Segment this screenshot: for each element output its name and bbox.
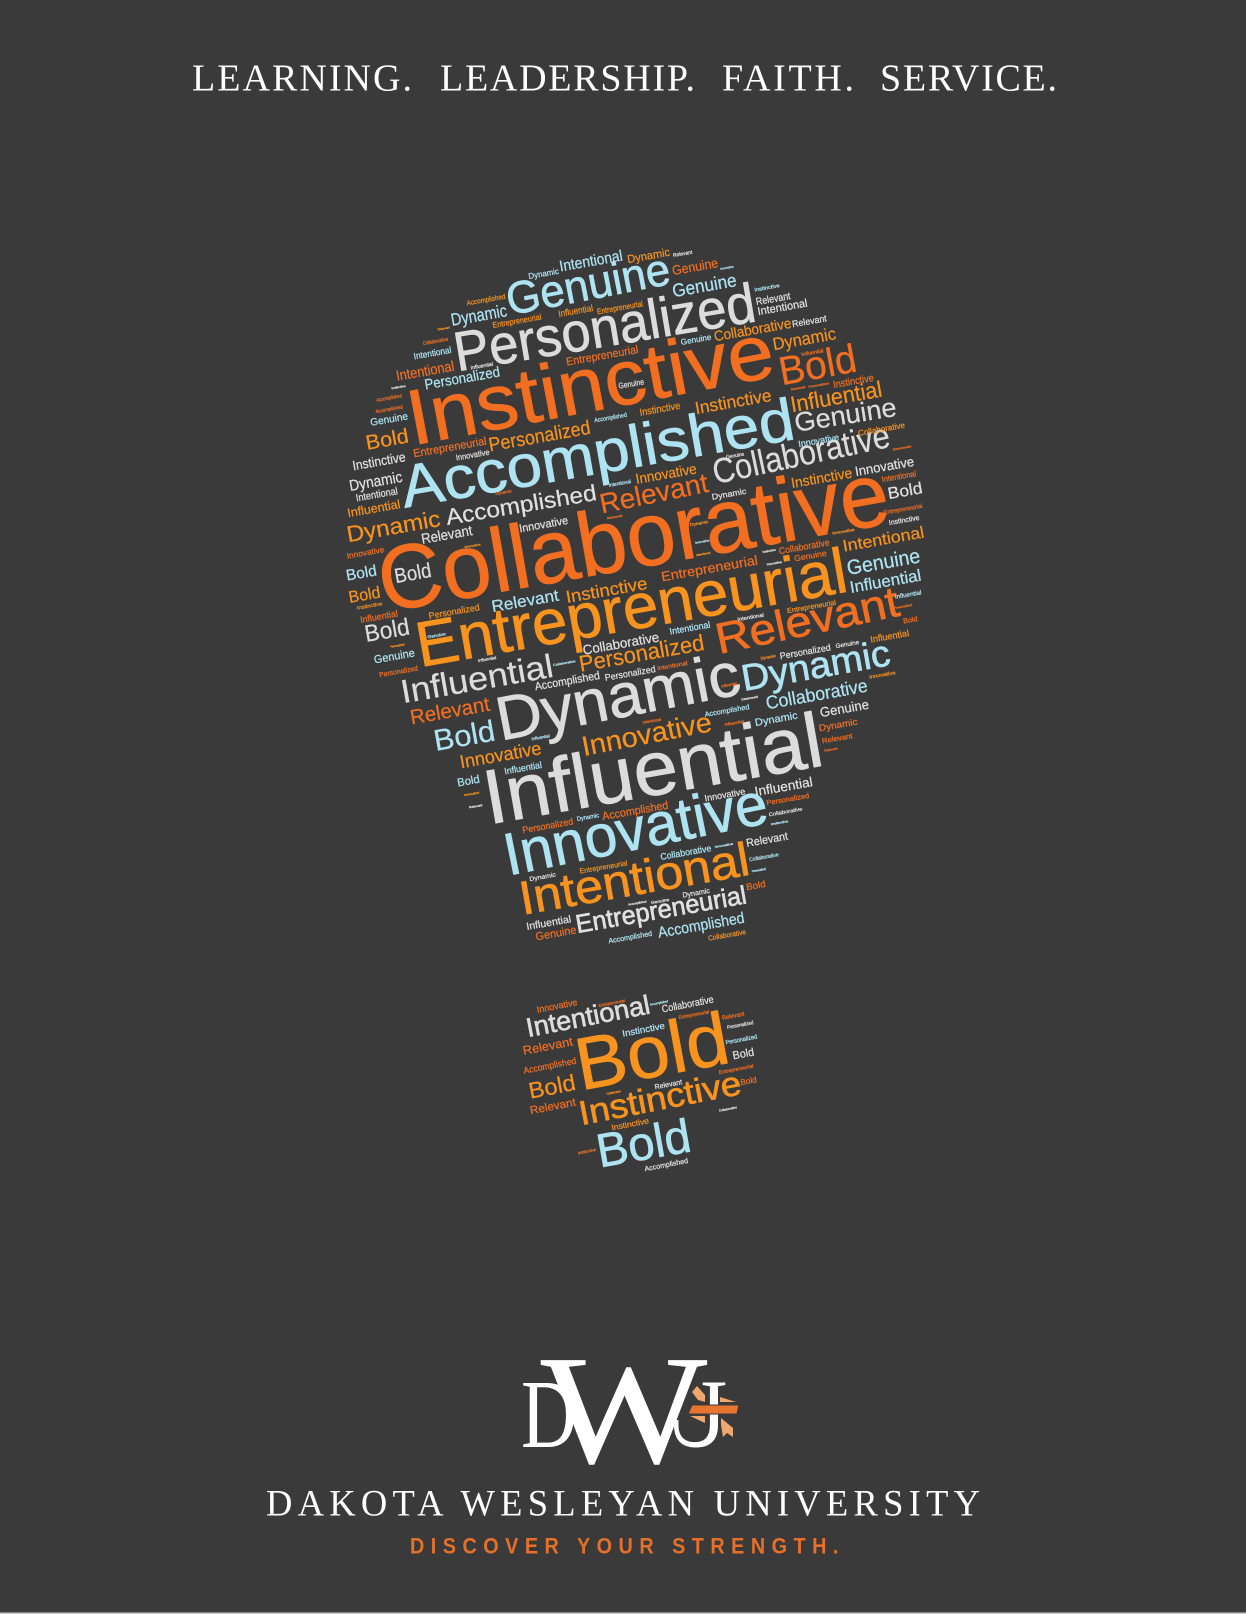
small words: Entrepreneurial (883, 503, 923, 517)
small base words: Instinctive (577, 1147, 597, 1155)
small words: Genuine (671, 255, 719, 278)
small words: Instinctive (888, 513, 920, 527)
small words: Intentional (413, 345, 452, 361)
small base words: Relevant (529, 1096, 578, 1117)
small words: Relevant (597, 467, 711, 519)
small words: Dynamic (344, 505, 442, 547)
small words: Collaborative (707, 927, 747, 943)
small words: Dynamic (690, 519, 709, 527)
small words: Accomplished (704, 702, 750, 719)
small base words: Entrepreneurial (718, 1064, 754, 1076)
small words: Innovative (464, 542, 481, 549)
small words: Personalized (487, 417, 592, 456)
small base words: Collaborative (606, 1089, 621, 1096)
small words: Relevant (490, 587, 561, 616)
small base words: Bold (732, 1046, 755, 1062)
word: Intentional (base): Intentional (523, 990, 652, 1043)
small words: Accomplished (594, 412, 628, 424)
small words: Relevant (469, 803, 483, 809)
small words: Intentional (642, 717, 661, 725)
small words: Intentional (355, 486, 399, 504)
small words: Entrepreneurial (786, 598, 837, 615)
small words: Genuine (845, 544, 922, 580)
small words: Personalized (577, 629, 706, 677)
small words: Collaborative (749, 852, 779, 863)
small words: Innovative (720, 265, 734, 271)
small words: Entrepreneurial (741, 695, 758, 702)
small words: Collaborative (582, 629, 660, 658)
small words: Intentional (558, 248, 624, 275)
small words: Genuine (370, 411, 409, 429)
small words: Influential (848, 567, 923, 597)
small words: Innovative (832, 527, 856, 536)
small words: Dynamic (682, 886, 711, 900)
small words: Entrepreneurial (607, 514, 623, 520)
small words: Innovative (695, 538, 710, 545)
small words: Personalized (522, 816, 574, 835)
small words: Instinctive (391, 384, 406, 390)
small words: Instinctive (351, 449, 407, 473)
small words: Dynamic (626, 247, 671, 266)
small words: Accomplished (601, 800, 669, 823)
small words: Dynamic (529, 872, 556, 883)
small base words: Relevant (522, 1034, 574, 1058)
small words: Accomplished (534, 670, 601, 693)
small words: Collaborative (778, 537, 830, 556)
small words: Personalized (808, 381, 829, 389)
small words: Personalized (751, 867, 767, 873)
small words: Genuine (726, 452, 745, 461)
small words: Relevant (420, 523, 474, 548)
small words: Influential (557, 303, 594, 319)
small base words: Collaborative (661, 995, 715, 1015)
word: Intentional: Intentional (515, 833, 753, 926)
small words: Accomplished (466, 292, 506, 307)
small words: Intentional (881, 469, 917, 484)
small words: Influential (470, 362, 494, 371)
small words: Bold (393, 559, 433, 588)
small words: Dynamic (818, 717, 859, 733)
small words: Influential (894, 589, 922, 601)
tagline: DISCOVER YOUR STRENGTH. (410, 1535, 838, 1559)
small words: Influential (397, 647, 556, 710)
small words: Entrepreneurial (579, 858, 628, 876)
small words: Personalized (378, 664, 419, 679)
small words: Personalized (766, 791, 810, 807)
small base words: Bold (526, 1069, 578, 1104)
small words: Bold (347, 584, 382, 607)
small words: Instinctive (356, 601, 383, 612)
word cloud: light bulb base (522, 990, 758, 1178)
small words: Personalized (423, 364, 501, 393)
small words: Influential (788, 376, 884, 417)
small words: Intentional (696, 551, 711, 557)
small words: Genuine (792, 392, 899, 438)
small words: Relevant (821, 731, 853, 745)
small words: Entrepreneurial (893, 444, 912, 451)
small words: Genuine (671, 269, 738, 301)
small words: Bold (431, 715, 498, 758)
small words: Dynamic (754, 711, 799, 729)
small words: Innovative (455, 448, 491, 463)
small words: Entrepreneurial (791, 385, 806, 391)
small words: Innovative (579, 706, 714, 762)
small words: Collaborative (709, 416, 893, 492)
title: Learning. Leadership. Faith. Service. (192, 58, 1057, 100)
logo: DWU monogram with cross (523, 1360, 738, 1465)
small words: Entrepreneurial (660, 553, 759, 584)
small words: Personalized (464, 791, 480, 797)
word: Collaborative: Collaborative (370, 443, 897, 632)
small words: Collaborative (553, 659, 576, 667)
small words: Personalized (390, 642, 405, 649)
small base words: Instinctive (611, 1116, 650, 1132)
small words: Accomplished (657, 910, 746, 942)
small words: Dynamic (576, 812, 600, 823)
small words: Bold (775, 336, 860, 394)
small words: Intentional (757, 298, 808, 318)
small words: Entrepreneurial (492, 313, 542, 330)
small words: Relevant (824, 746, 838, 753)
small words: Genuine (819, 697, 870, 720)
logo: DWU monogram with cross: W (541, 1324, 707, 1496)
small words: Relevant (755, 291, 792, 308)
logo: DWU monogram with cross: D (521, 1361, 577, 1468)
small words: Influential (724, 719, 744, 727)
small words: Intentional (841, 524, 926, 556)
small words: Instinctive (771, 819, 789, 826)
small words: Dynamic (449, 300, 509, 330)
word: Relevant: Relevant (711, 578, 903, 664)
small words: Innovative (766, 560, 783, 567)
small words: Intentional (608, 479, 632, 489)
word: Influential: Influential (477, 697, 829, 841)
small words: Bold (886, 479, 924, 503)
small words: Relevant (408, 693, 492, 729)
small base words: Bold (740, 1075, 758, 1087)
small words: Bold (363, 614, 412, 648)
small words: Accomplished (444, 479, 598, 530)
small words: Accomplished (376, 393, 403, 404)
small words: Instinctive (790, 466, 854, 492)
small words: Intentional (657, 660, 688, 672)
small words: Influential (359, 609, 399, 625)
small words (344, 247, 926, 945)
small words: Innovative (518, 515, 569, 535)
small words: Influential (503, 760, 543, 776)
small words: Entrepreneurial (412, 436, 488, 460)
small words: Genuine (650, 897, 670, 905)
small base words: Personalized (725, 1033, 758, 1046)
small base words: Entrepreneurial (598, 998, 625, 1008)
word: Instinctive: Instinctive (399, 306, 781, 462)
small words: Bold (364, 425, 410, 455)
small base words: Collaborative (719, 1105, 738, 1113)
small words: Genuine (680, 333, 712, 347)
small words: Genuine (535, 924, 577, 943)
small words: Influential (531, 733, 550, 741)
word: Dynamic (grey): Dynamic (490, 640, 746, 755)
small base words (522, 995, 758, 1173)
word cloud: light bulb glass (344, 243, 926, 945)
small words: Influential (526, 914, 572, 933)
small words: Personalized (779, 642, 831, 661)
word: Entrepreneurial: Entrepreneurial (410, 534, 852, 681)
small base words: Innovative (536, 997, 578, 1015)
small base words: Relevant (721, 1011, 745, 1022)
small words: Dynamic (711, 487, 747, 502)
small base words: Accomplished (644, 1156, 689, 1173)
small words: Relevant (437, 325, 450, 332)
small base words: Personalized (727, 1020, 754, 1031)
small words: Innovative (458, 737, 543, 772)
small words: Instinctive (639, 401, 682, 419)
small words: Instinctive (832, 373, 875, 391)
small words: Innovative (346, 545, 386, 561)
small words: Genuine (618, 377, 645, 391)
small words: Genuine (373, 647, 416, 666)
word: Genuine: Genuine (502, 243, 674, 325)
small words: Personalized (604, 664, 656, 683)
small words: Intentional (737, 613, 764, 623)
small words: Collaborative (764, 675, 869, 713)
small words: Personalized (894, 603, 913, 610)
title: Learning. Leadership. Faith. Service.: LEARNING. (192, 58, 412, 100)
small words: Bold (745, 879, 766, 892)
small words: Innovative (714, 842, 734, 849)
title: Learning. Leadership. Faith. Service.: LEADERSHIP. (440, 58, 695, 100)
word: Dynamic (blue): Dynamic (738, 631, 893, 699)
small words: Collaborative (713, 316, 793, 345)
title: Learning. Leadership. Faith. Service.: SERVICE. (880, 58, 1057, 100)
small words: Innovative (869, 670, 896, 681)
small words: Collaborative (422, 337, 449, 347)
small words: Influential (721, 681, 737, 689)
small words: Bold (345, 562, 378, 585)
small words: Innovative (634, 461, 698, 488)
logo: DWU monogram with cross: U (665, 1360, 727, 1468)
small words: Influential (801, 348, 824, 358)
word: Personalized: Personalized (449, 272, 760, 383)
small words: Entrepreneurial (565, 344, 639, 369)
small words: Dynamic (495, 488, 512, 496)
small words: Personalized (428, 602, 480, 621)
small words: Dynamic (771, 323, 838, 354)
small words: Dynamic (348, 469, 404, 495)
university name: DAKOTA WESLEYAN UNIVERSITY (266, 1482, 980, 1524)
small base words: Entrepreneurial (678, 1009, 710, 1021)
small words: Influential (346, 497, 401, 520)
small words: Influential (870, 628, 910, 645)
small words: Accomplished (608, 929, 653, 945)
small words: Influential (753, 774, 814, 799)
small words: Collaborative (857, 421, 906, 438)
small words: Innovative (797, 432, 840, 449)
small words: Intentional (395, 359, 456, 385)
small words: Relevant (791, 313, 828, 329)
small words: Relevant (673, 250, 693, 259)
small words: Influential (477, 655, 497, 663)
small base words: Instinctive (621, 1021, 666, 1039)
small words: Dynamic (528, 267, 560, 281)
word: Entrepreneurial (white): Entrepreneurial (573, 881, 749, 939)
small words: Innovative (704, 786, 746, 803)
small base words: Relevant (654, 1077, 683, 1091)
small words: Instinctive (564, 573, 649, 607)
word: Accomplished: Accomplished (395, 385, 799, 521)
small words: Dynamic (760, 653, 776, 661)
small words: Bold (456, 774, 481, 789)
small words: Genuine (427, 631, 447, 639)
word: Bold (large orange): Bold (568, 996, 735, 1106)
small words: Genuine (835, 639, 860, 650)
small words: Accomplished (375, 404, 404, 415)
small words: Instinctive (762, 548, 776, 554)
small words: Entrepreneurial (596, 299, 644, 316)
word: Bold (blue): Bold (592, 1110, 695, 1178)
small base words: Accomplished (650, 999, 669, 1007)
word: Instinctive (base): Instinctive (576, 1064, 745, 1133)
small words: Instinctive (754, 283, 780, 294)
small words: Bold (902, 614, 918, 626)
title: Learning. Leadership. Faith. Service.: FAITH. (722, 58, 854, 100)
small words: Instinctive (693, 385, 773, 418)
small words: Collaborative (660, 843, 712, 862)
small words: Accomplished (628, 899, 647, 907)
word: Innovative: Innovative (497, 769, 773, 888)
small words: Relevant (745, 831, 790, 850)
small words: Innovative (854, 454, 915, 479)
small words: Collaborative (768, 807, 803, 818)
small base words: Accomplished (523, 1056, 577, 1076)
small words: Intentional (669, 620, 711, 637)
small words: Genuine (793, 549, 828, 563)
